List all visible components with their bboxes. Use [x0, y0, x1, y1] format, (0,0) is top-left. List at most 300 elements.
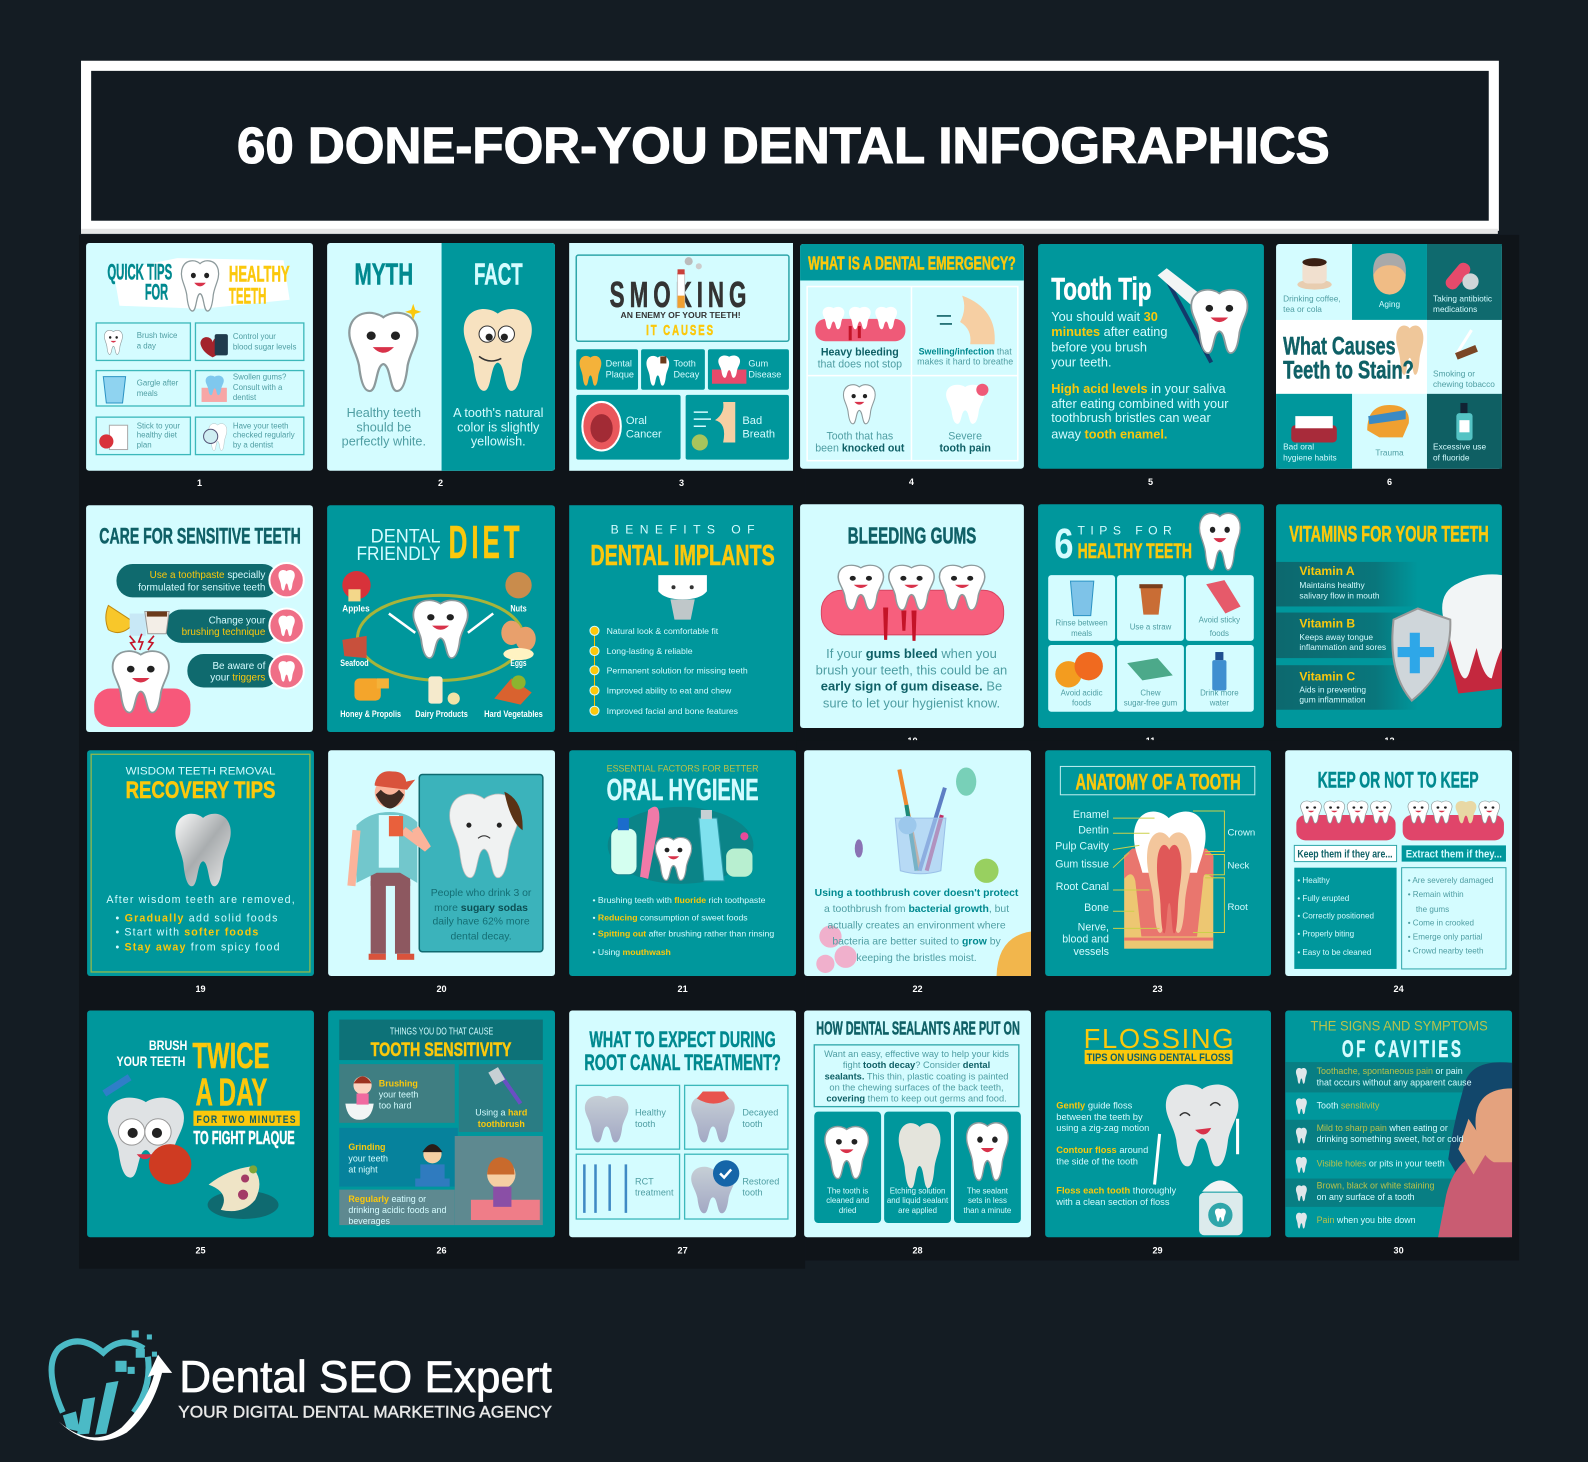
card labels: meals: [1071, 629, 1092, 638]
left labels: Pulp Cavity: [1055, 840, 1110, 852]
captions: hygiene habits: [1283, 453, 1337, 463]
step labels: tooth: [635, 1119, 655, 1129]
number labels row 3: 20: [436, 984, 447, 994]
body text: minutes after eating: [1051, 324, 1167, 339]
text: Severe: [948, 430, 982, 442]
card text: daily have 62% more: [432, 916, 530, 927]
body text: If your gums bleed when you: [826, 646, 997, 661]
number labels row 1: 4: [909, 477, 915, 487]
tips text: with a clean section of floss: [1055, 1197, 1170, 1207]
pill text: formulated for sensitive teeth: [138, 582, 265, 593]
tips text: Contour floss around: [1056, 1145, 1148, 1155]
icon: yellowish tooth: [464, 309, 532, 391]
icon: white tooth: [349, 313, 417, 391]
heading: BLEEDING GUMS: [848, 523, 976, 549]
icon: shield: [1392, 608, 1450, 701]
step labels: Decayed: [742, 1108, 778, 1118]
vitamin text: Aids in preventing: [1299, 685, 1366, 695]
number labels row 4: 30: [1394, 1245, 1404, 1255]
symptom text: Pain when you bite down: [1317, 1215, 1416, 1225]
heading: TIPS FOR: [1078, 524, 1172, 538]
number labels row 4: [195, 1245, 1404, 1255]
numbers row 2: [907, 736, 1395, 746]
step labels: RCT: [635, 1177, 654, 1187]
myth text: should be: [356, 420, 411, 434]
cause labels: Dental: [606, 359, 632, 369]
body text: keeping the bristles moist.: [856, 953, 977, 964]
card captions: than a minute: [964, 1206, 1012, 1215]
panel 9: dental implants: [569, 505, 793, 732]
heading: FOR TWO MINUTES: [196, 1114, 297, 1126]
cause labels: Plaque: [606, 370, 634, 380]
captions: chewing tobacco: [1433, 379, 1495, 389]
pill text: Change your: [209, 616, 266, 627]
icon: germs: [816, 767, 1031, 976]
heading: BENEFITS OF: [611, 523, 755, 537]
vitamin text: salivary flow in mouth: [1299, 590, 1380, 600]
heading: WISDOM TEETH REMOVAL: [126, 766, 275, 778]
icon: bleeding gums: [815, 307, 905, 341]
column headers: Keep them if they are...: [1297, 849, 1393, 861]
number labels row 3: 24: [1394, 984, 1405, 994]
cause labels: Decay: [673, 370, 700, 380]
heading: THE SIGNS AND SYMPTOMS: [1311, 1019, 1488, 1035]
tip text: Consult with a: [233, 383, 283, 392]
cards: [1048, 575, 1254, 712]
heading: [1283, 332, 1414, 385]
symptom text: Tooth sensitivity: [1317, 1101, 1380, 1111]
symptom bands: [1285, 1062, 1512, 1207]
right labels: Crown: [1227, 827, 1255, 838]
title banner: [81, 66, 1498, 234]
heading: ESSENTIAL FACTORS FOR BETTER: [607, 763, 759, 774]
heading: 6: [1054, 521, 1074, 568]
heading: FOR: [145, 280, 168, 305]
panel 3: smoking: Bad: [742, 415, 762, 427]
icon: plaque germ: [208, 1165, 279, 1219]
tip text: [137, 331, 296, 450]
panel 9: dental implants: DENTAL IMPLANTS: [590, 540, 775, 572]
panel 29: flossing: TIPS ON USING DENTAL FLOSS: [1087, 1052, 1230, 1064]
food labels: Honey & Propolis: [340, 709, 401, 719]
tip text: Have your teeth: [233, 421, 289, 430]
left labels: Gum tissue: [1055, 859, 1109, 871]
diagram: tooth cross-section: [1124, 812, 1213, 949]
panel 10: bleeding gums: [800, 504, 1024, 728]
panel 21: oral hygiene: ORAL HYGIENE: [607, 774, 759, 807]
panel 27: root canal: [569, 1010, 796, 1237]
diagram leader lines: [1113, 811, 1224, 932]
heading: A DAY: [195, 1072, 268, 1115]
panel 25: twice a day: [87, 1010, 314, 1237]
benefits list: Natural look & comfortable fit: [607, 626, 719, 636]
number labels row 1: [197, 477, 1392, 488]
pill text: Be aware of: [212, 661, 266, 672]
benefits list: [607, 626, 748, 716]
card labels: sugar-free gum: [1124, 699, 1178, 708]
tip text: by a dentist: [233, 441, 274, 450]
panel 19: recovery tips: [87, 750, 314, 976]
bands: [1276, 562, 1418, 710]
pills: [116, 564, 279, 687]
body text: after eating combined with your: [1051, 396, 1229, 411]
vitamin text: gum inflammation: [1299, 695, 1366, 705]
heading: TEETH: [229, 284, 266, 309]
it causes: IT CAUSES: [646, 322, 715, 339]
icons: [1291, 253, 1479, 442]
intro text: [824, 1049, 1009, 1104]
left list: • Easy to be cleaned: [1297, 948, 1371, 957]
bullet list: • Spitting out after brushing rather than rinsing: [592, 929, 774, 939]
fact text: yellowish.: [471, 434, 526, 448]
captions: Smoking or: [1433, 369, 1475, 379]
panel 3: smoking: Breath: [742, 428, 775, 440]
step labels: Restored: [742, 1177, 779, 1187]
icon: man: [351, 771, 427, 960]
heading: [107, 259, 290, 309]
body text: After wisdom teeth are removed,: [106, 894, 295, 906]
card labels: Chew: [1140, 689, 1161, 698]
card labels: Use a straw: [1130, 623, 1172, 632]
heading: Tooth Tip: [1051, 272, 1152, 307]
tip text: checked regularly: [233, 430, 295, 439]
left labels: Nerve,: [1078, 921, 1109, 933]
number labels row 4: 25: [195, 1245, 206, 1255]
body text: before you brush: [1051, 339, 1147, 354]
number labels row 4: 28: [912, 1245, 923, 1255]
captions: Drinking coffee,: [1283, 294, 1341, 304]
symptom text: Visible holes or pits in your teeth: [1317, 1158, 1445, 1168]
body text: bacteria are better suited to grow by: [832, 937, 1002, 948]
step labels: tooth: [742, 1188, 763, 1198]
cause icons: [580, 356, 746, 451]
panel 8: dental diet: [327, 505, 555, 732]
body text: • Stay away from spicy food: [115, 942, 280, 954]
panel 3: smoking: [569, 243, 793, 471]
panel 29: flossing: [1045, 1010, 1271, 1237]
symptom text: Toothache, spontaneous pain or pain: [1317, 1066, 1463, 1076]
right list: • Are severely damaged: [1408, 876, 1493, 885]
panel 20: sugary sodas: [328, 750, 555, 976]
cause cards: [576, 349, 789, 460]
panel 21: oral hygiene: [569, 750, 796, 976]
column bodies: [1294, 868, 1506, 969]
left list: • Properly biting: [1297, 930, 1354, 939]
food labels: Eggs: [510, 658, 527, 668]
heading: DENTAL: [371, 527, 441, 548]
heading: KEEP OR NOT TO KEEP: [1318, 768, 1479, 793]
heading: CARE FOR SENSITIVE TEETH: [99, 524, 301, 549]
panel 7: sensitive teeth: [86, 505, 313, 732]
panel 1: quick tips: [86, 243, 313, 471]
left list: [1297, 876, 1374, 957]
number labels row 1: 2: [438, 478, 443, 488]
symptom text: on any surface of a tooth: [1317, 1192, 1415, 1202]
vitamin text: Maintains healthy: [1299, 580, 1365, 590]
cell text: drinking acidic foods and: [348, 1205, 446, 1215]
body text: away tooth enamel.: [1051, 426, 1167, 441]
intro text: fight tooth decay? Consider dental: [843, 1060, 990, 1070]
cell text: your teeth: [348, 1153, 388, 1163]
left labels: Dentin: [1078, 824, 1109, 836]
left list: • Fully erupted: [1297, 894, 1349, 903]
right list: • Come in crooked: [1408, 918, 1474, 927]
icon: cigarette: [678, 257, 702, 308]
pill text: brushing technique: [182, 627, 266, 638]
icon: brush: [104, 1077, 130, 1093]
pill text: your triggers: [210, 672, 265, 683]
tips text: the side of the tooth: [1056, 1156, 1138, 1166]
body text: [816, 646, 1007, 711]
heading: HEALTHY TEETH: [1078, 539, 1192, 563]
bullet list: • Using mouthwash: [592, 947, 671, 957]
icon: stained tooth: [1396, 326, 1423, 375]
text: been knocked out: [815, 443, 905, 455]
numbers row 2: 10: [907, 736, 918, 746]
number labels row 3: 23: [1153, 984, 1163, 994]
icon: lemon and cup: [106, 605, 169, 636]
cell text: your teeth: [379, 1090, 418, 1100]
panel 2: myth and fact: [327, 243, 555, 471]
vitamin text: Keeps away tongue: [1299, 632, 1373, 642]
cause labels: Gum: [748, 359, 768, 369]
card icons: [825, 1123, 1008, 1188]
right list: • Crowd nearby teeth: [1408, 947, 1483, 956]
icon: winking tooth: [181, 261, 219, 311]
cards: [814, 1112, 1021, 1223]
tip text: a day: [137, 341, 156, 350]
heading: TWICE: [192, 1035, 269, 1076]
icon: small teeth: [1296, 1068, 1307, 1229]
column headers: [1294, 845, 1506, 862]
heading: WHAT IS A DENTAL EMERGENCY?: [808, 253, 1016, 273]
panel 4: dental emergency: [800, 244, 1024, 469]
pill icons: [269, 563, 304, 688]
panel 8: dental diet: DIET: [449, 516, 524, 568]
icon: tooth with floss: [1155, 1085, 1238, 1185]
benefits list: Improved facial and bone features: [607, 706, 739, 716]
cause labels: Disease: [748, 370, 781, 380]
food labels: Dairy Products: [415, 709, 468, 719]
captions: tea or cola: [1283, 304, 1322, 314]
cell text: Brushing: [379, 1078, 418, 1088]
logo: dental seo expert: [52, 1330, 553, 1441]
icon: brush head: [1158, 268, 1202, 307]
heading: HEALTHY: [229, 261, 290, 286]
brush stroke: [113, 258, 290, 309]
tips text: between the teeth by: [1056, 1112, 1143, 1122]
heading: [1054, 521, 1192, 568]
icon: tooth and gum: [1442, 574, 1502, 694]
tip icons: [99, 330, 228, 451]
food labels: Nuts: [510, 604, 527, 614]
card text: dental decay.: [450, 932, 512, 943]
headings: FACT: [474, 259, 523, 292]
body text: sure to let your hygienist know.: [823, 696, 1000, 711]
heading: QUICK TIPS: [107, 259, 172, 284]
icon: healthy teeth: [1296, 801, 1396, 840]
right labels: Root: [1227, 902, 1248, 913]
captions: Bad oral: [1283, 442, 1314, 452]
heading: HOW DENTAL SEALANTS ARE PUT ON: [816, 1019, 1020, 1039]
vitamin text: Vitamin C: [1299, 669, 1355, 683]
panel 28: dental sealants: [804, 1010, 1031, 1237]
food labels: Hard Vegetables: [484, 709, 543, 719]
captions: [1283, 294, 1495, 463]
icon: damaged teeth: [1403, 801, 1504, 840]
tips text: Floss each tooth thoroughly: [1056, 1186, 1177, 1196]
vitamin text: [1299, 564, 1386, 705]
benefits list: Permanent solution for missing teeth: [607, 665, 748, 675]
tip text: healthy diet: [137, 430, 178, 439]
symptom text: drinking something sweet, hot or cold: [1317, 1134, 1464, 1144]
panel 22: toothbrush cover: [804, 750, 1031, 976]
body text: • Start with softer foods: [115, 927, 258, 939]
cause labels: Tooth: [673, 359, 696, 369]
tip boxes: [96, 323, 304, 455]
tip text: plan: [137, 441, 152, 450]
panel 4: dental emergency: Swelling/infection that: [919, 346, 1012, 356]
cell text: Regularly eating or: [348, 1194, 426, 1204]
heading: FLOSSING: [1084, 1023, 1234, 1054]
right list: • Emerge only partial: [1408, 933, 1483, 942]
heading: VITAMINS FOR YOUR TEETH: [1289, 522, 1489, 547]
panel 30: cavities: [1285, 1010, 1512, 1237]
symptom text: [1317, 1066, 1472, 1225]
tips text: using a zig-zag motion: [1056, 1123, 1149, 1133]
myth text: perfectly white.: [342, 434, 426, 448]
numbers row 2: 12: [1384, 736, 1395, 746]
heading: BRUSH: [149, 1038, 187, 1054]
tip text: dentist: [233, 393, 257, 402]
tip text: Stick to your: [137, 421, 180, 430]
captions: Aging: [1379, 299, 1400, 309]
brand name: Dental SEO Expert: [179, 1353, 553, 1402]
headings: MYTH: [354, 259, 413, 292]
icon: gum: [94, 688, 190, 727]
vitamin text: inflammation and sores: [1299, 642, 1386, 652]
cell text: [348, 1078, 527, 1226]
card: [419, 775, 543, 952]
number labels row 4: 27: [678, 1245, 688, 1255]
panel 19: recovery tips: RECOVERY TIPS: [126, 777, 275, 804]
number labels row 1: 3: [679, 478, 684, 488]
right list: • Remain within: [1408, 890, 1464, 899]
tip text: blood sugar levels: [233, 342, 296, 351]
tips text: [1055, 1101, 1177, 1207]
body text: [1051, 309, 1229, 441]
number labels row 4: 26: [436, 1245, 447, 1255]
icon: painful tooth: [946, 384, 988, 424]
cell text: at night: [348, 1164, 378, 1174]
body text: brush your teeth, this could be an: [816, 662, 1007, 677]
card labels: Avoid sticky: [1199, 616, 1240, 625]
icon: profile: [937, 296, 995, 344]
left labels: Enamel: [1073, 809, 1109, 821]
cell text: toothbrush: [478, 1119, 525, 1129]
headings: [354, 259, 523, 292]
heading: TO FIGHT PLAQUE: [193, 1128, 295, 1148]
cell text: beverages: [348, 1216, 391, 1226]
panel 26: tooth sensitivity: TOOTH SENSITIVITY: [371, 1040, 512, 1061]
icon: decayed tooth: [450, 792, 523, 878]
icon: teeth: [838, 565, 985, 610]
left labels: blood and: [1062, 934, 1109, 946]
number labels row 3: 22: [912, 984, 923, 994]
heading: YOUR TEETH: [116, 1054, 185, 1070]
text: tooth pain: [939, 443, 991, 455]
heading: THINGS YOU DO THAT CAUSE: [390, 1027, 493, 1038]
card text: [431, 888, 532, 943]
tagline: YOUR DIGITAL DENTAL MARKETING AGENCY: [178, 1403, 552, 1421]
icon: blood: [883, 607, 917, 641]
heading: [356, 527, 441, 565]
title: 60 DONE-FOR-YOU DENTAL INFOGRAPHICS: [237, 117, 1330, 174]
food labels: [340, 604, 543, 719]
number labels row 4: 29: [1153, 1245, 1163, 1255]
card captions: cleaned and: [826, 1196, 869, 1205]
step labels: [635, 1108, 779, 1198]
body text: • Gradually add solid foods: [115, 912, 277, 924]
fact text: [453, 406, 543, 448]
heading: FRIENDLY: [356, 544, 441, 565]
panel 30: cavities: OF CAVITIES: [1342, 1036, 1463, 1063]
text: that does not stop: [818, 359, 902, 371]
card labels: foods: [1210, 629, 1229, 638]
left labels: Bone: [1084, 902, 1109, 914]
vitamin text: Vitamin A: [1299, 564, 1355, 578]
body text: [815, 888, 1019, 964]
body text: a toothbrush from bacterial growth, but: [824, 904, 1009, 915]
right list: [1408, 876, 1493, 956]
number labels row 3: 19: [195, 984, 206, 994]
right labels: [1227, 827, 1255, 913]
card text: People who drink 3 or: [431, 888, 532, 899]
step labels: tooth: [742, 1119, 763, 1129]
bullet list: [592, 895, 774, 957]
icon: floss container: [1199, 1181, 1243, 1235]
cell text: Grinding: [348, 1142, 386, 1152]
panel 3: smoking: Oral: [626, 415, 647, 427]
icon: implant tooth: [658, 575, 707, 620]
intro text: on the chewing surfaces of the back teeth,: [829, 1082, 1004, 1092]
cell text: too hard: [379, 1101, 412, 1111]
tip text: Swollen gums?: [233, 373, 287, 382]
card labels: Drink more: [1200, 689, 1239, 698]
number labels row 1: 1: [197, 478, 202, 488]
heading: ANATOMY OF A TOOTH: [1076, 770, 1241, 795]
card labels: Rinse between: [1056, 619, 1108, 628]
left labels: Root Canal: [1056, 881, 1109, 893]
heading: What Causes: [1283, 332, 1396, 360]
vitamin text: Vitamin B: [1299, 617, 1355, 631]
intro text: covering them to keep out germs and food.: [826, 1094, 1007, 1104]
right labels: Neck: [1227, 861, 1250, 872]
icon: woman: [1438, 1062, 1512, 1237]
benefits list: Improved ability to eat and chew: [607, 686, 732, 696]
icon: tooth mascot: [1191, 290, 1247, 353]
cell text: Using a hard: [475, 1108, 527, 1118]
icon: tooth mascot: [108, 1098, 184, 1178]
step boxes: [576, 1085, 788, 1219]
card captions: are applied: [898, 1206, 937, 1215]
symptom text: that occurs without any apparent cause: [1317, 1077, 1472, 1087]
icon: gum: [821, 590, 1004, 635]
icon: boxing glove: [149, 1144, 191, 1185]
benefits list: Long-lasting & reliable: [607, 646, 693, 656]
right list: the gums: [1416, 905, 1449, 914]
body text: your teeth.: [1051, 355, 1111, 370]
